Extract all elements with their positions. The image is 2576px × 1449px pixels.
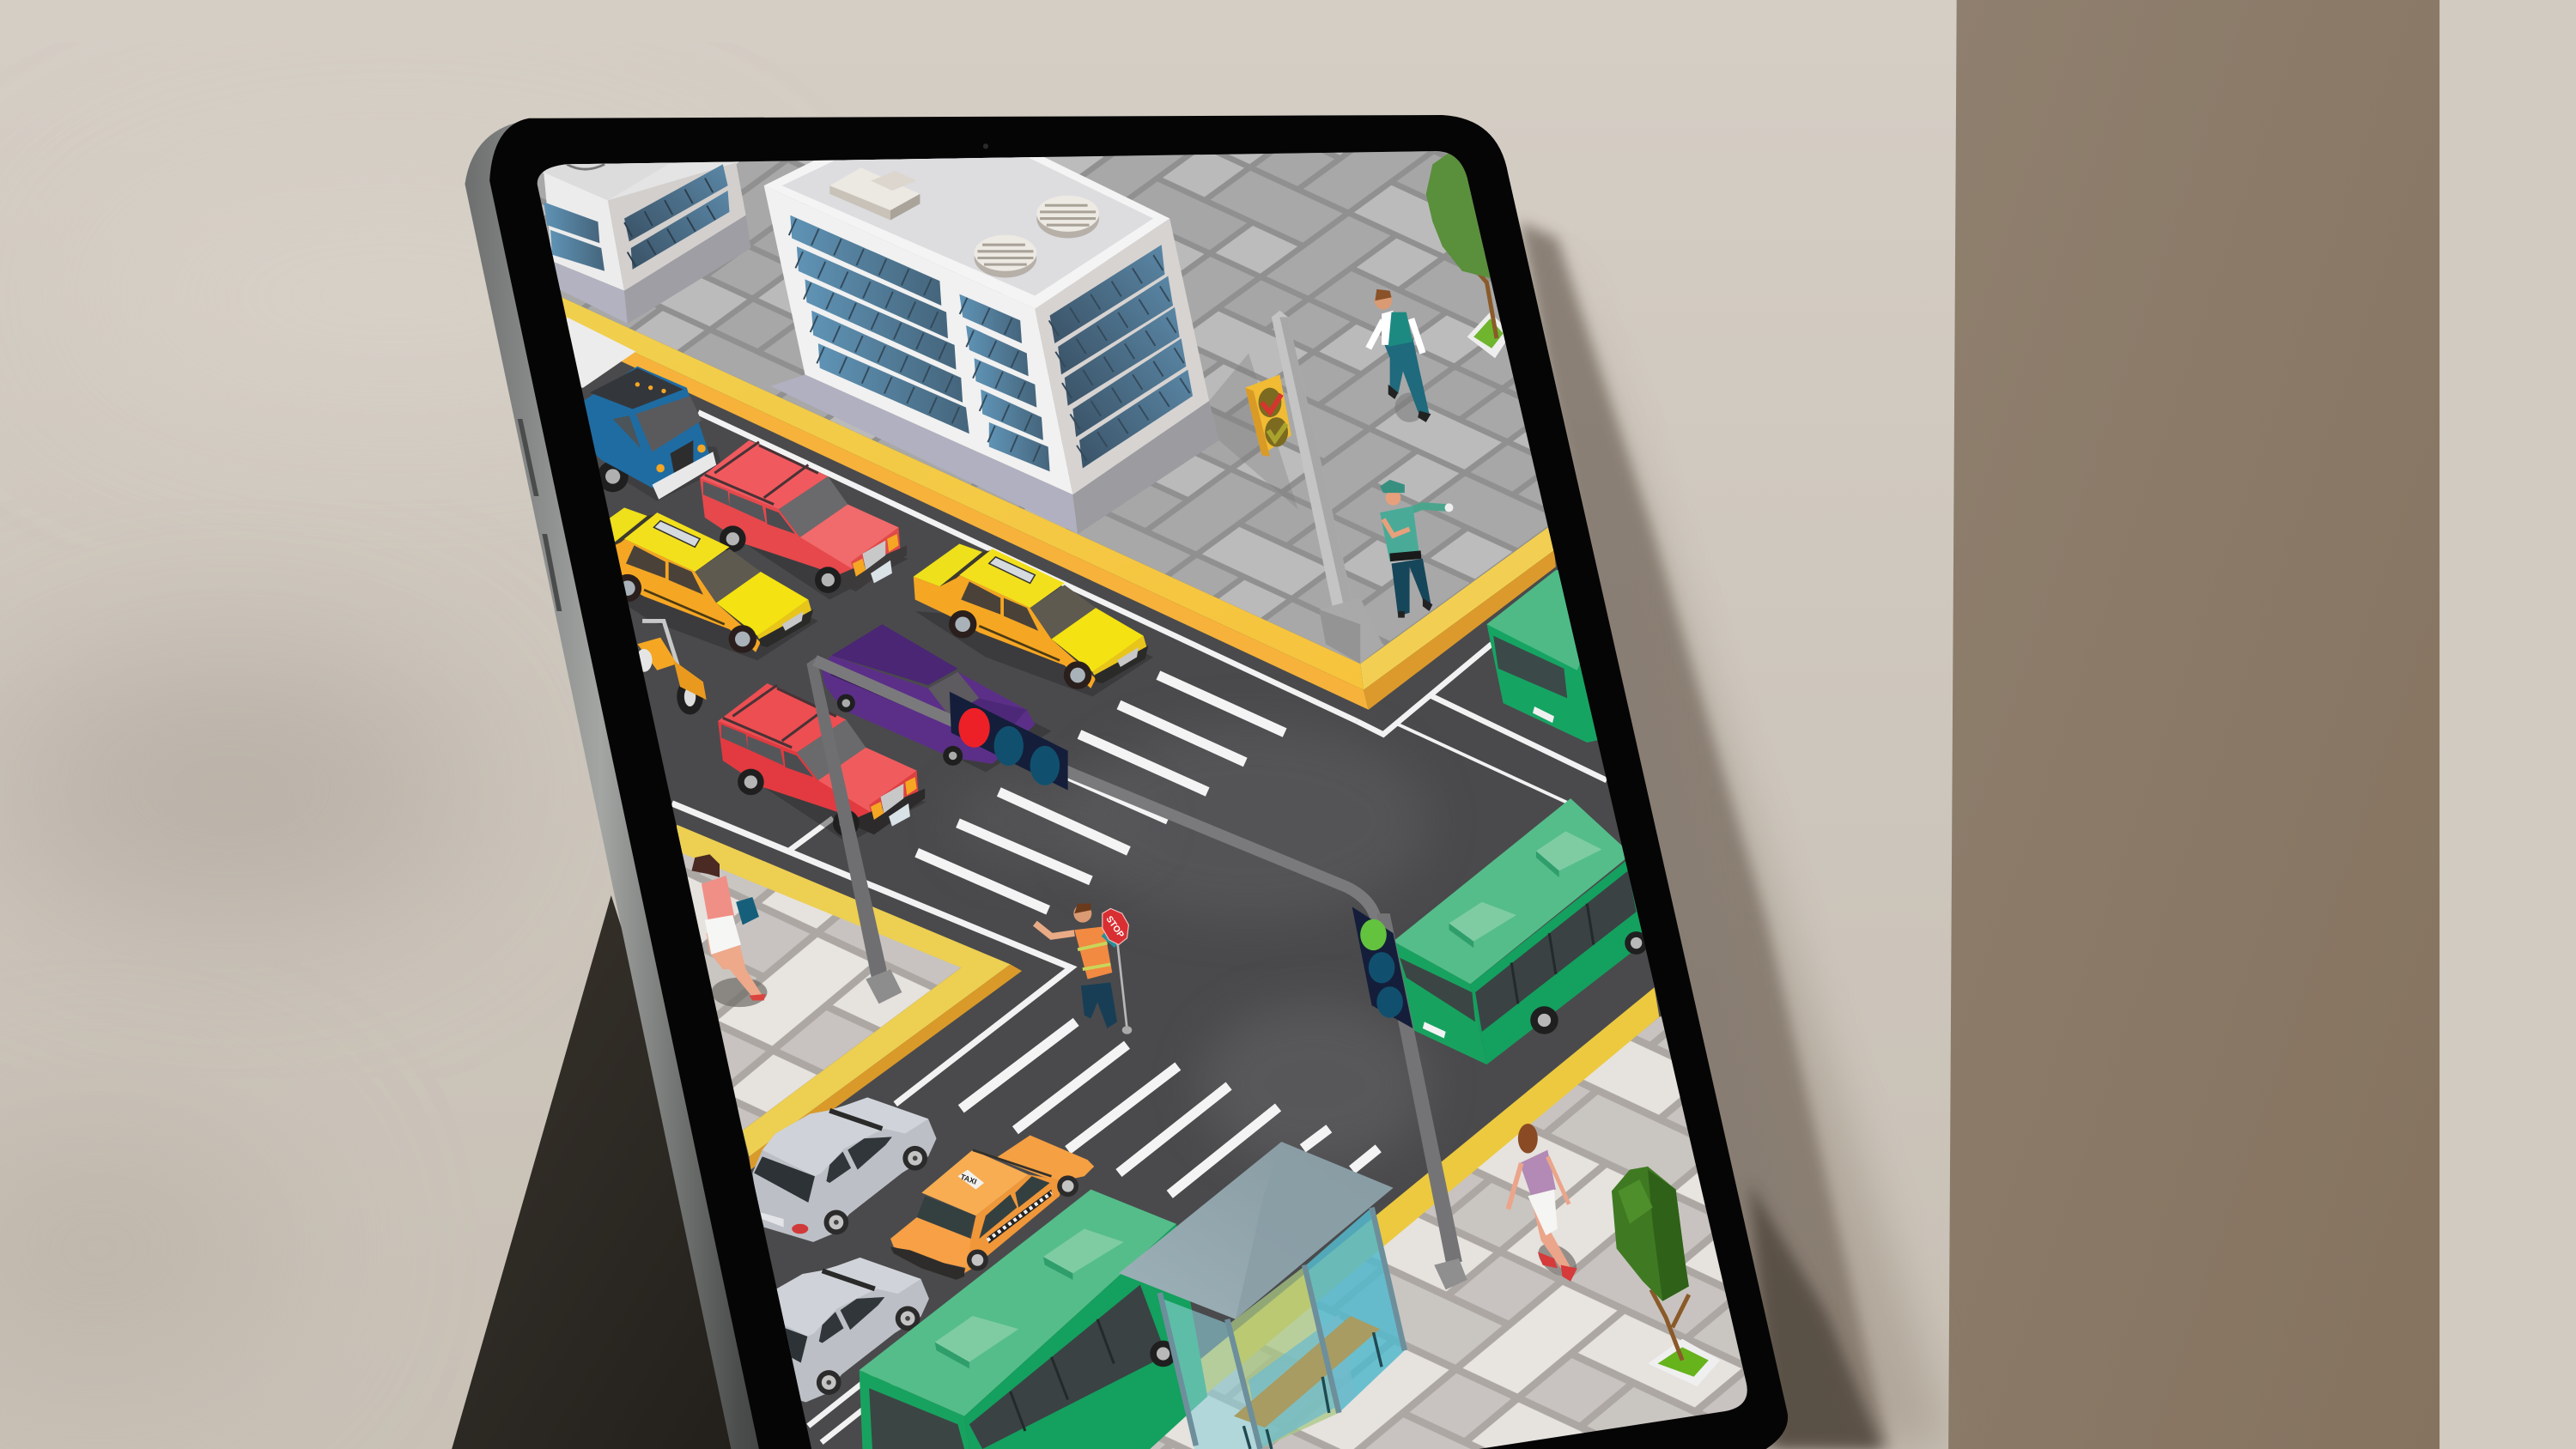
dark tablet stand xyxy=(452,895,788,1449)
roof vents xyxy=(975,196,1099,277)
traffic police officer xyxy=(1380,480,1453,618)
taxi roof sign: TAXI xyxy=(959,1173,978,1186)
orange motorbike xyxy=(635,621,707,715)
upper yellow curb xyxy=(534,282,1556,710)
front camera xyxy=(983,143,988,149)
silver car 2 xyxy=(745,1258,929,1402)
lower left sidewalk and curb xyxy=(657,816,1022,1170)
bus roof vents xyxy=(1449,831,1601,948)
screen: isometric intersection illustration xyxy=(526,140,1807,1449)
building roof xyxy=(764,144,1170,309)
green traffic signal head xyxy=(1352,906,1413,1028)
taxi roof sign xyxy=(957,1170,984,1190)
asphalt road xyxy=(526,140,1774,1449)
tablet device xyxy=(465,115,1807,1449)
right wall column xyxy=(1948,0,2576,1449)
green bus right xyxy=(1393,798,1648,1064)
crosswalk lower xyxy=(961,1022,1378,1194)
silver car 1 xyxy=(752,1097,937,1242)
upper sidewalk xyxy=(526,140,1552,664)
worker legs xyxy=(1081,982,1117,1028)
shelter roof xyxy=(1119,1142,1393,1319)
yellow taxi right xyxy=(914,543,1153,696)
pedestrian man walking xyxy=(1369,289,1431,422)
small corner building xyxy=(543,161,750,324)
roof air-conditioning unit xyxy=(829,167,920,220)
shelter glass panels xyxy=(1306,1208,1405,1413)
red SUV 1 xyxy=(700,440,908,600)
road lane markings xyxy=(672,412,1607,1442)
signal arm left pole xyxy=(806,658,1376,1003)
bus stop shelter xyxy=(1119,1142,1405,1449)
blue truck xyxy=(559,317,723,501)
traffic signal pole upper xyxy=(1272,311,1383,664)
red SUV 2 xyxy=(718,683,927,843)
tablet black bezel xyxy=(489,115,1788,1449)
main office building xyxy=(764,144,1297,534)
tablet side buttons xyxy=(518,419,562,611)
yellow taxi left xyxy=(578,507,818,660)
building windows left wall xyxy=(790,215,1050,471)
tablet silver frame xyxy=(465,120,805,1449)
shelter posts xyxy=(1160,1208,1405,1449)
red traffic signal head xyxy=(950,692,1068,791)
pedestrian woman in purple xyxy=(1508,1124,1583,1283)
tree upper right xyxy=(1426,153,1511,358)
building shadow xyxy=(1209,353,1297,509)
window mullions xyxy=(792,227,1189,458)
stop sign: STOP xyxy=(1104,915,1126,940)
building base xyxy=(770,374,1078,534)
pedestrian woman with handbag xyxy=(691,854,767,1007)
orange taxi xyxy=(890,1135,1094,1280)
crosswalk upper xyxy=(917,676,1285,910)
green bus upper right xyxy=(1487,570,1619,743)
tablet cast shadow on wall xyxy=(1520,221,1955,1449)
building walls xyxy=(764,185,1072,494)
worker vest xyxy=(1074,926,1112,979)
tree lower right xyxy=(1612,1167,1720,1386)
purple car xyxy=(822,624,1051,773)
green bus lower xyxy=(860,1190,1207,1449)
signal pole right xyxy=(1376,913,1467,1289)
lower right sidewalk and curb xyxy=(1150,987,1747,1449)
building windows right wall xyxy=(1050,245,1193,468)
traffic worker with stop sign xyxy=(1035,904,1132,1034)
bus roof vents xyxy=(935,1229,1124,1368)
stop sign xyxy=(1103,908,1128,944)
shelter bench xyxy=(1234,1316,1380,1428)
yellow signal light xyxy=(1245,374,1291,457)
